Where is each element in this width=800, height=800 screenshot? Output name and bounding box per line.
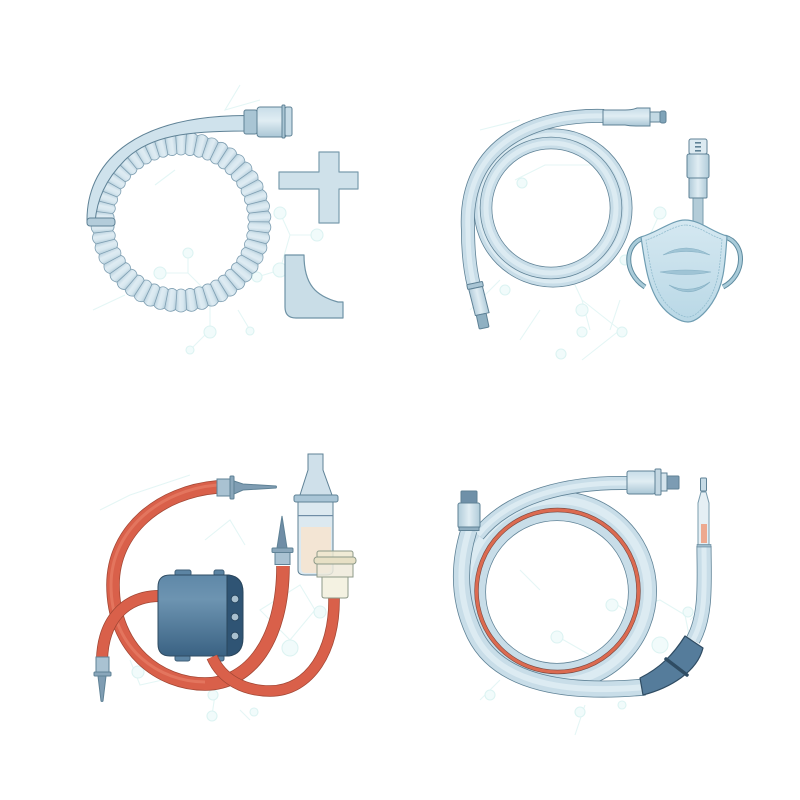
left connector — [458, 491, 480, 530]
mask ear loops — [629, 237, 741, 287]
lower right red tube — [212, 598, 334, 691]
corrugated coil ribs — [91, 132, 271, 312]
nebulizer bottle — [294, 454, 338, 575]
glass probe tip — [697, 478, 711, 547]
bottom connector — [467, 281, 492, 330]
outer coil ring — [466, 500, 648, 682]
dark rubber boot — [640, 636, 703, 695]
red heated wire — [476, 510, 638, 672]
cross connector — [279, 152, 358, 223]
top connector — [603, 108, 666, 126]
top nozzle — [217, 476, 276, 499]
panel: insulated coil with heated wire and probe — [458, 469, 711, 695]
outer hose — [461, 530, 645, 689]
inner coil ring — [481, 516, 633, 668]
background molecule pattern — [93, 85, 700, 735]
pump side panel with buttons — [227, 575, 243, 656]
right probe tube — [693, 546, 704, 640]
bottom left nozzle — [94, 657, 111, 702]
bottle cap — [314, 551, 356, 598]
panel: coiled hose with face mask — [467, 108, 741, 330]
coiled hose loops — [468, 116, 626, 286]
left branch tube — [102, 596, 160, 660]
smooth tube section — [87, 116, 245, 222]
mask connector stem — [687, 139, 709, 230]
elbow connector — [285, 255, 343, 318]
face mask — [641, 220, 727, 322]
pump tabs — [175, 570, 224, 661]
top connector — [627, 469, 679, 495]
panel: red tubing with pump and bottle — [94, 454, 356, 702]
panel: coiled corrugated tube with connectors — [87, 105, 358, 318]
long red tube — [111, 485, 283, 684]
upper hose — [478, 483, 628, 535]
tube clamp — [87, 218, 115, 226]
right nozzle — [272, 516, 293, 564]
pump body — [158, 575, 227, 656]
top connector — [244, 105, 292, 138]
